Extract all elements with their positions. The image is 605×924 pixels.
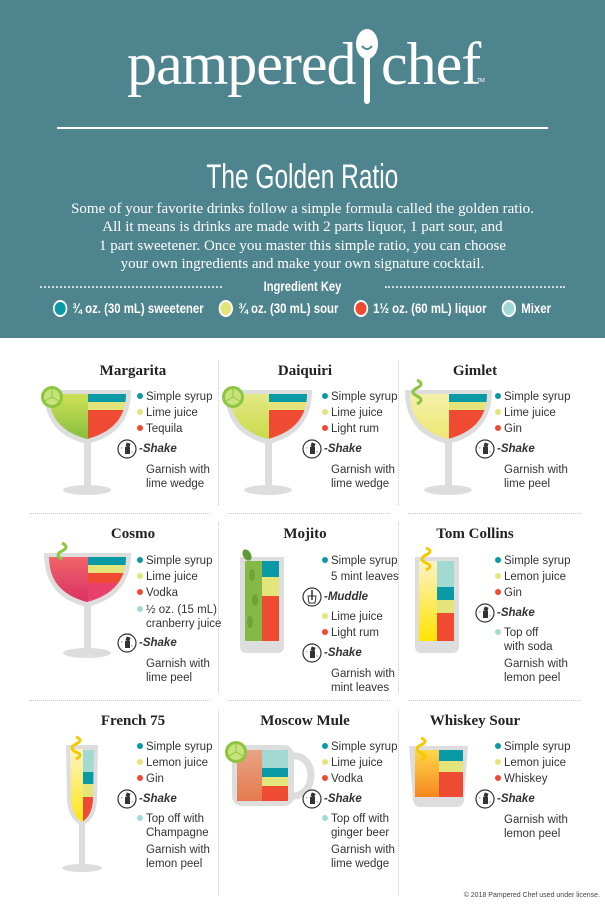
heading: Tom Collins <box>436 526 514 542</box>
ingredient list: Lime juice <box>331 611 383 623</box>
ingredient list: Lime juice <box>504 407 556 419</box>
ingredient list: mint leaves <box>331 682 389 694</box>
panel: Tom Collins <box>415 526 570 684</box>
panel: French 75 <box>62 713 212 872</box>
header band <box>0 0 605 338</box>
ingredient list <box>475 391 570 490</box>
ingredient list: 5 mint leaves <box>331 571 399 583</box>
ingredient list: Garnish with <box>331 668 395 680</box>
panel: Cosmo <box>44 526 221 684</box>
ingredient list: cranberry juice <box>146 618 221 630</box>
ingredient list: lime wedge <box>331 478 389 490</box>
ingredient list <box>117 741 212 870</box>
ingredient list: Lemon juice <box>504 757 566 769</box>
ingredient list: Top off <box>504 627 538 639</box>
ingredient list: -Shake <box>139 793 177 805</box>
ingredient list: Simple syrup <box>146 391 212 403</box>
ingredient list: Lime juice <box>331 757 383 769</box>
ingredient list <box>475 741 570 840</box>
ingredient list: Simple syrup <box>331 391 397 403</box>
ingredient list: ½ oz. (15 mL) <box>146 604 217 616</box>
ingredient list: Simple syrup <box>504 741 570 753</box>
ingredient list: -Shake <box>497 443 535 455</box>
ingredient list: Gin <box>146 773 164 785</box>
ingredient list: -Shake <box>497 607 535 619</box>
intro paragraph: your own ingredients and make your own signature cocktail. <box>121 256 484 272</box>
heading: Margarita <box>100 363 166 379</box>
ingredient list: Garnish with <box>504 658 568 670</box>
ingredient list: Lemon juice <box>146 757 208 769</box>
heading: Cosmo <box>111 526 155 542</box>
ingredient list: Light rum <box>331 627 379 639</box>
icon: daiquiri glass <box>222 386 312 495</box>
ingredient list <box>475 555 570 684</box>
icon: collins glass <box>415 546 459 653</box>
ingredient list <box>302 741 398 870</box>
ingredient list: Whiskey <box>504 773 547 785</box>
panel: Whiskey Sour <box>409 713 570 840</box>
icon: mojito glass <box>240 549 284 653</box>
panel: Moscow Mule <box>225 713 398 870</box>
ingredient list: lime wedge <box>146 478 204 490</box>
ingredient list: lime peel <box>146 672 192 684</box>
ingredient list: Garnish with <box>331 464 395 476</box>
ingredient list: -Shake <box>324 443 362 455</box>
ingredient list: Vodka <box>146 587 178 599</box>
ingredient key: ¾ oz. (30 mL) sweetener ¾ oz. (30 mL) sour 1½ oz. (60 mL) liquor Mixer <box>72 301 551 316</box>
ingredient list: lemon peel <box>146 858 202 870</box>
intro paragraph: All it means is drinks are made with 2 parts liquor, 1 part sour, and <box>102 219 503 235</box>
ingredient list: -Shake <box>497 793 535 805</box>
ingredient list: Simple syrup <box>504 555 570 567</box>
ingredient list: Gin <box>504 587 522 599</box>
ingredient key: Ingredient Key <box>264 278 341 294</box>
ingredient list <box>302 555 399 694</box>
ingredient list: Simple syrup <box>146 555 212 567</box>
ingredient list: Simple syrup <box>504 391 570 403</box>
ingredient list: Garnish with <box>146 658 210 670</box>
ingredient list: Simple syrup <box>331 555 397 567</box>
ingredient list: Champagne <box>146 827 209 839</box>
ingredient list: -Shake <box>139 443 177 455</box>
heading: Gimlet <box>453 363 497 379</box>
ingredient list: Garnish with <box>504 814 568 826</box>
icon: gimlet glass <box>405 378 492 495</box>
ingredient list: Top off with <box>331 813 389 825</box>
intro paragraph: 1 part sweetener. Once you master this simple ratio, you can choose <box>99 238 506 254</box>
ingredient list: lemon peel <box>504 672 560 684</box>
ingredient list: -Shake <box>324 793 362 805</box>
intro paragraph <box>71 201 534 272</box>
logo: pampered <box>127 31 356 97</box>
icon: champagne flute <box>62 736 102 872</box>
heading: Mojito <box>283 526 327 542</box>
panel: Mojito <box>240 526 399 694</box>
ingredient list: Lime juice <box>331 407 383 419</box>
logo <box>127 29 485 104</box>
ingredient list: lime wedge <box>331 858 389 870</box>
ingredient key <box>40 278 565 317</box>
logo: TM <box>477 78 484 84</box>
ingredient list: Garnish with <box>331 844 395 856</box>
ingredient list: Vodka <box>331 773 363 785</box>
ingredient list: Garnish with <box>146 464 210 476</box>
ingredient list: lime peel <box>504 478 550 490</box>
ingredient list: Simple syrup <box>331 741 397 753</box>
heading: Daiquiri <box>278 363 332 379</box>
dividers <box>218 360 219 505</box>
ingredient list: Lemon juice <box>504 571 566 583</box>
heading: Moscow Mule <box>260 713 350 729</box>
icon: rocks glass <box>409 736 468 807</box>
ingredient list: ginger beer <box>331 827 389 839</box>
title: The Golden Ratio <box>206 158 398 196</box>
ingredient list: Simple syrup <box>146 741 212 753</box>
ingredient list <box>117 555 221 684</box>
ingredient list <box>117 391 212 490</box>
ingredient list: Lime juice <box>146 571 198 583</box>
ingredient list: Tequila <box>146 423 182 435</box>
icon: copper mug <box>225 741 314 806</box>
ingredient list <box>302 391 398 490</box>
footer credit: © 2018 Pampered Chef used under license. <box>464 892 600 899</box>
intro paragraph: Some of your favorite drinks follow a simple formula called the golden ratio. <box>71 201 534 217</box>
ingredient list: Garnish with <box>504 464 568 476</box>
heading: French 75 <box>101 713 165 729</box>
ingredient list: with soda <box>504 641 553 653</box>
ingredient list: Top off with <box>146 813 204 825</box>
panel: Margarita <box>41 363 212 495</box>
ingredient list: Light rum <box>331 423 379 435</box>
panel: Daiquiri <box>222 363 398 495</box>
logo: chef <box>381 31 480 97</box>
ingredient list: Garnish with <box>146 844 210 856</box>
ingredient list: -Shake <box>324 647 362 659</box>
icon: spoon <box>356 29 378 104</box>
icon: margarita glass <box>41 386 131 495</box>
ingredient list: Gin <box>504 423 522 435</box>
panel: Gimlet <box>405 363 570 495</box>
icon: cosmo glass <box>44 542 131 658</box>
ingredient list: -Muddle <box>324 591 368 603</box>
ingredient list: -Shake <box>139 637 177 649</box>
ingredient list: Lime juice <box>146 407 198 419</box>
ingredient list: lemon peel <box>504 828 560 840</box>
heading: Whiskey Sour <box>430 713 520 729</box>
